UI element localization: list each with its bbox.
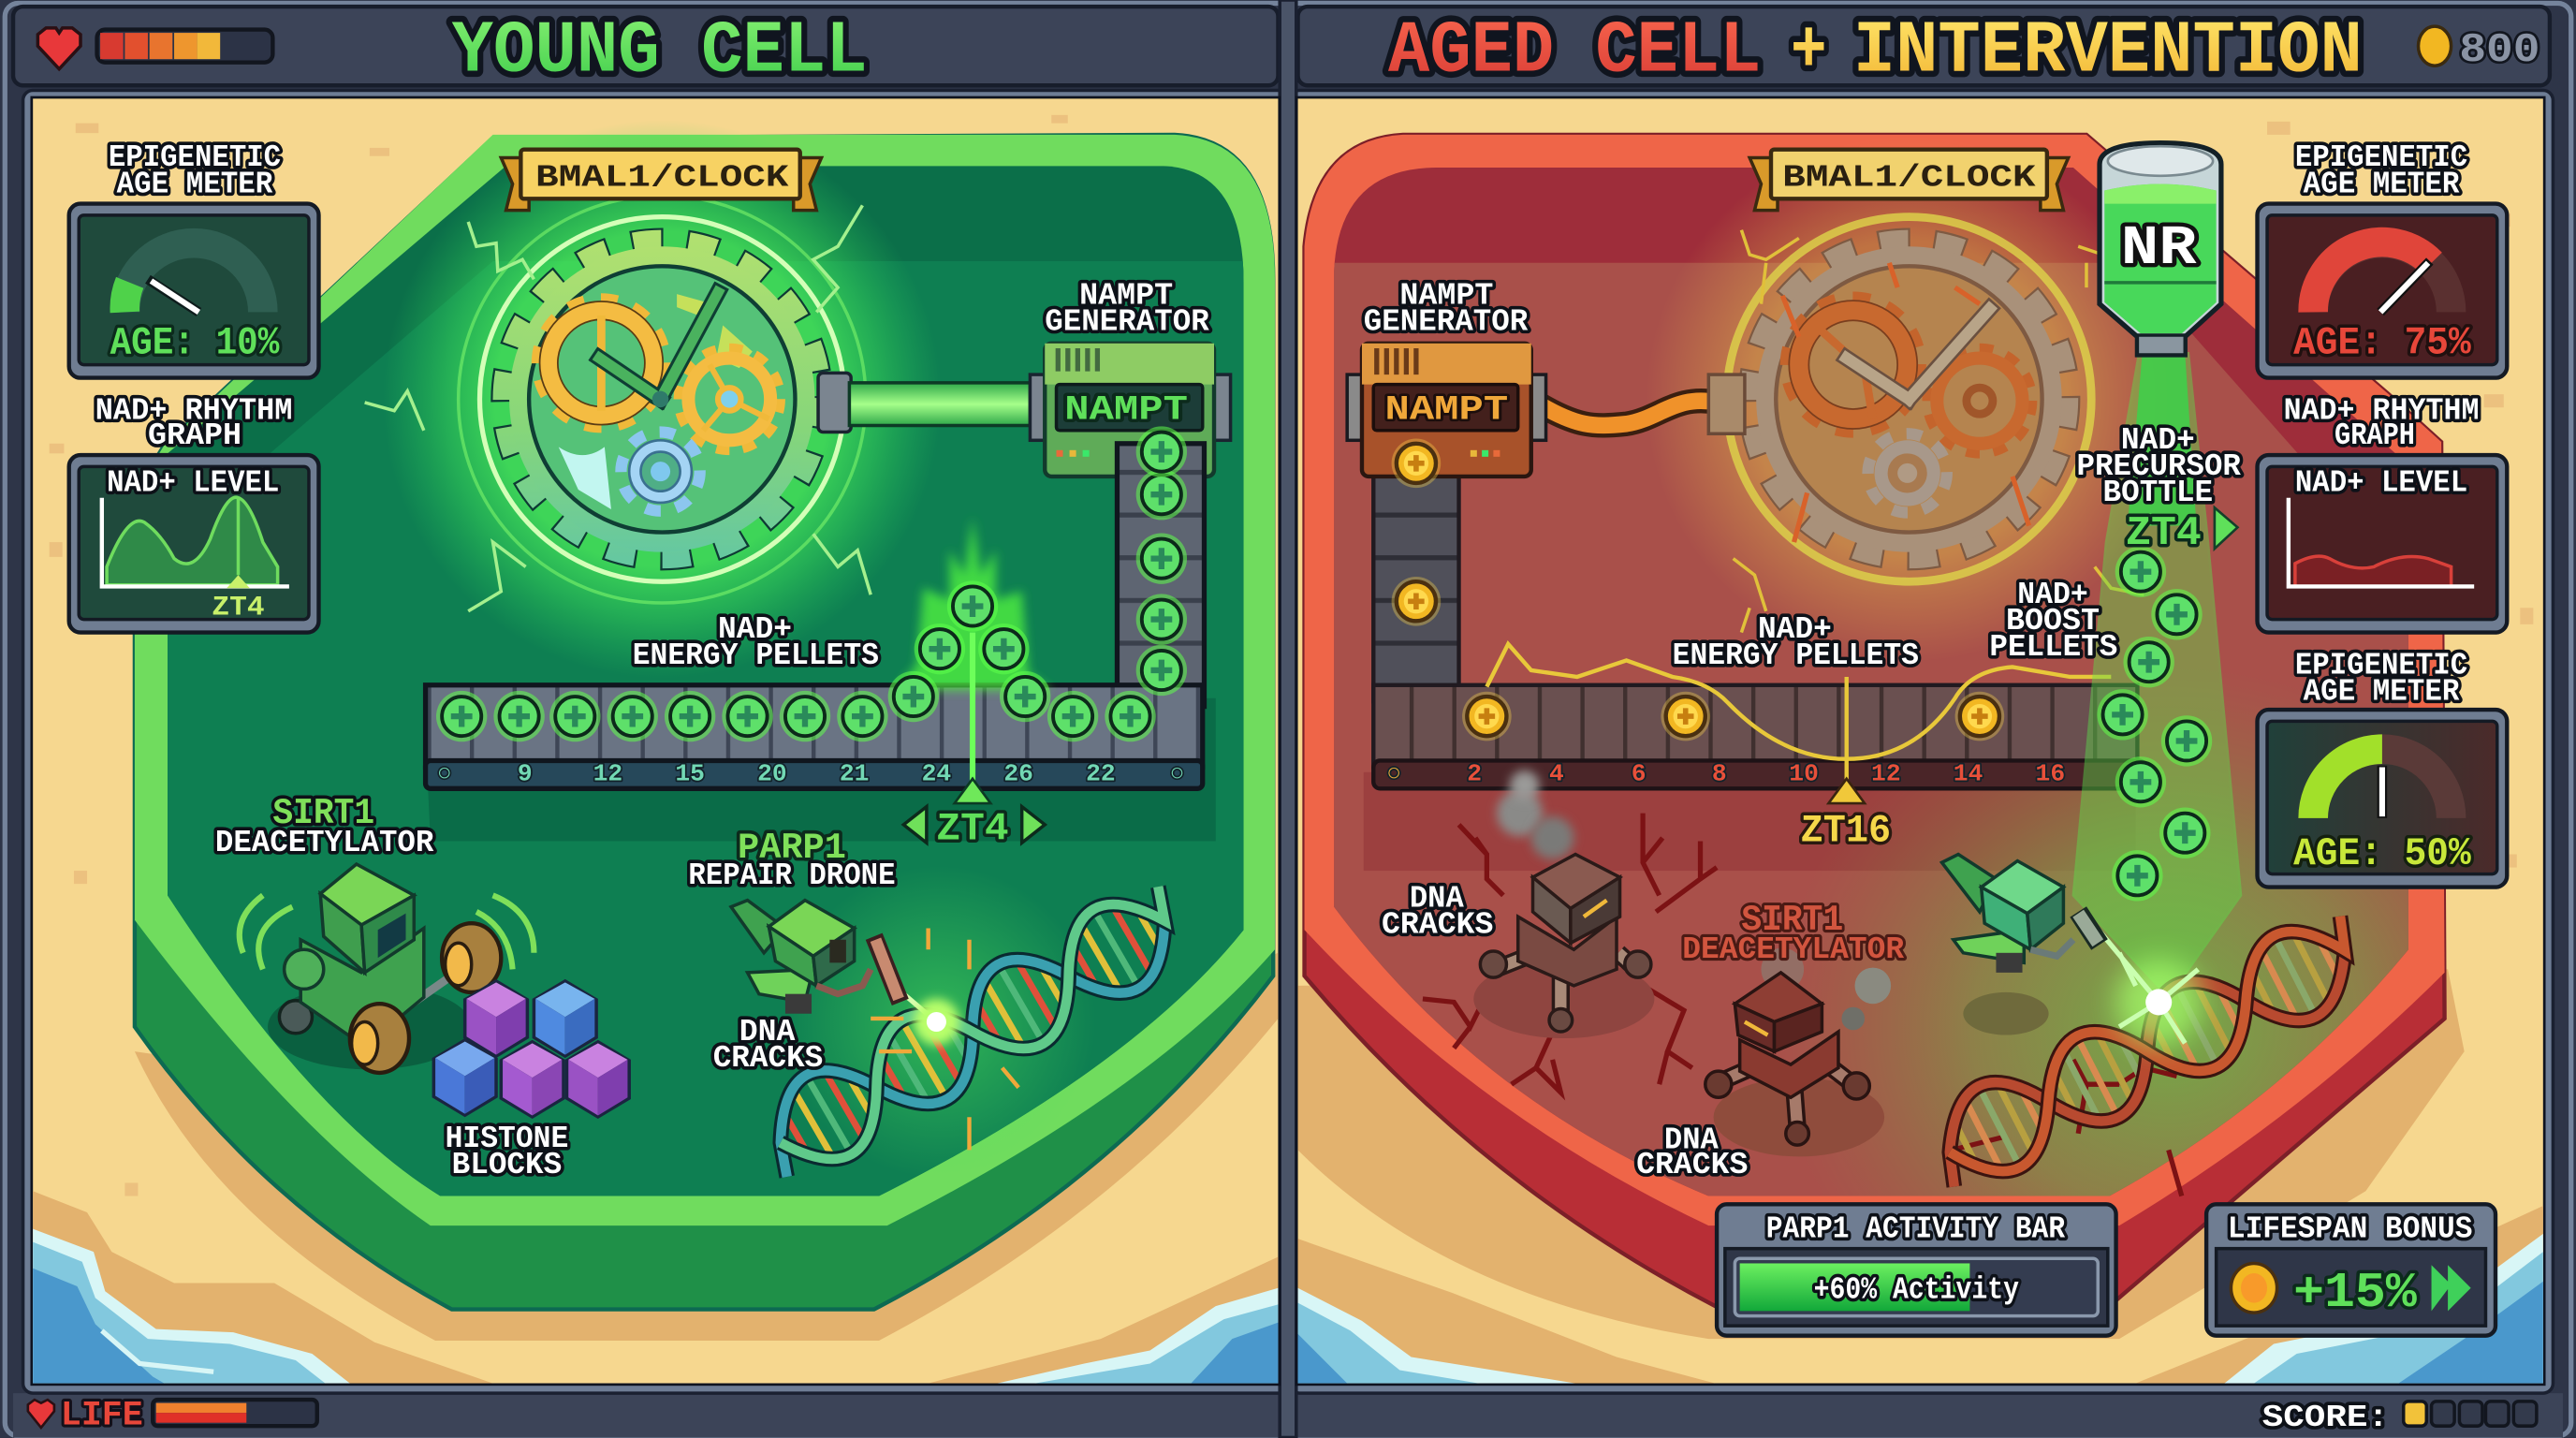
label: NAD+ precursor bottle: PRECURSOR — [2076, 449, 2241, 485]
coin count: 800 — [2459, 27, 2539, 74]
conveyor hour ticks: 2 — [1467, 760, 1482, 788]
ZT4 marker: young: ZT4 — [936, 807, 1009, 852]
conveyor hour ticks: 12 — [1871, 760, 1901, 788]
label: DNA cracks 2: DNA — [1664, 1123, 1719, 1159]
DNA glow: young — [783, 866, 1096, 1178]
label: epigenetic age meter: AGE METER — [117, 167, 272, 202]
broken SIRT1 robot 1 — [1473, 770, 1654, 1038]
shore: dark sand right — [929, 1256, 1278, 1384]
health bar — [97, 30, 272, 63]
age meter panel: restored 50: AGE: 50% — [2293, 831, 2471, 876]
age meter panel: aged 75 — [2258, 204, 2507, 378]
conveyor hour ticks: 12 — [593, 760, 622, 788]
label: histone blocks: BLOCKS — [452, 1148, 562, 1183]
label: DNA cracks: CRACKS — [713, 1041, 823, 1077]
NAD+ rhythm graph panel: aged — [2258, 455, 2507, 633]
label: NAD+ rhythm graph: GRAPH — [148, 418, 242, 454]
NAD+ rhythm line on belt: aged — [1486, 644, 2111, 785]
text labels: aged panel — [1364, 140, 2479, 1183]
NAMPT generator: aged: NAMPT — [1385, 390, 1508, 430]
title: aged cell: AGED CELL — [1388, 8, 1761, 93]
age meter panel: young: AGE: 10% — [110, 320, 280, 365]
sparks — [365, 205, 871, 611]
label: SIRT1 deacetylator: SIRT1 — [272, 793, 374, 834]
conveyor hour ticks: 26 — [1003, 760, 1033, 788]
NAD+ boost pellets — [2097, 546, 2212, 902]
lifespan bonus panel: LIFESPAN BONUS — [2228, 1211, 2472, 1247]
conveyor hour ticks: 9 — [518, 760, 533, 788]
icon: heart — [28, 1400, 54, 1428]
label: epigenetic age meter 1 — [2295, 140, 2467, 202]
PARP1 activity bar panel: +60% Activity — [1814, 1272, 2019, 1308]
age meter panel: young — [69, 204, 318, 378]
broken SIRT1 robot 2 — [1705, 948, 1891, 1156]
precursor beam — [2073, 353, 2241, 997]
lifespan bonus panel — [2206, 1204, 2496, 1336]
ZT4 marker: intervention — [2126, 507, 2237, 557]
label: DNA cracks 1: DNA — [1410, 882, 1464, 917]
label: NAMPT generator: GENERATOR — [1364, 305, 1528, 341]
score pips — [2404, 1401, 2537, 1426]
label: DNA cracks: DNA — [739, 1015, 795, 1050]
top HUD: young — [37, 8, 868, 93]
NAD+ rhythm graph panel: young — [69, 455, 318, 633]
title: young cell: YOUNG CELL — [452, 8, 868, 93]
label: NAD+ rhythm graph — [2284, 393, 2479, 454]
conveyor hour ticks: ○ — [437, 760, 452, 788]
PARP1 activity bar panel — [1717, 1204, 2116, 1336]
broken pipe: aged — [1536, 374, 1745, 433]
label: NAD+ energy pellets: NAD+ — [718, 612, 792, 648]
label: epigenetic age meter 2 — [2295, 648, 2467, 711]
PARP1 activity bar panel: PARP1 ACTIVITY BAR — [1766, 1211, 2065, 1247]
label: NAD+ boost pellets: NAD+ — [2017, 578, 2088, 613]
label: BMAL1/CLOCK banner aged: BMAL1/CLOCK — [1782, 160, 2036, 196]
conveyor hour ticks: 4 — [1549, 760, 1564, 788]
sand specks — [50, 115, 1068, 1196]
water: right shore — [997, 1288, 1278, 1384]
ZT4 peak flame — [896, 518, 1051, 690]
rusted gears — [1786, 298, 2032, 513]
conveyor hour ticks: 20 — [757, 760, 787, 788]
top HUD: aged — [1388, 8, 2539, 93]
PARP1 drone: aged — [1942, 855, 2100, 1035]
label: NAD+ boost pellets: BOOST — [2006, 604, 2100, 639]
label: SIRT1 deacetylator aged — [1682, 900, 1904, 968]
bottom HUD: life — [28, 1396, 317, 1435]
blue gear — [621, 433, 700, 511]
label: NAD+ rhythm graph: NAD+ RHYTHM — [95, 393, 292, 429]
label: life: LIFE — [61, 1396, 143, 1435]
NAD+ rhythm graph panel: aged: NAD+ LEVEL — [2295, 466, 2467, 502]
ZT4 marker: young — [903, 633, 1045, 852]
SIRT1 robot: young — [240, 864, 534, 1073]
beam ground glow — [1823, 715, 2408, 1196]
cell outer wall — [1305, 135, 2445, 1306]
label: epigenetic age meter 2: EPIGENETIC — [2295, 648, 2467, 683]
label: SIRT1 deacetylator: DEACETYLATOR — [215, 826, 433, 861]
label: PARP1 repair drone — [688, 828, 896, 894]
label: NAMPT generator — [1045, 279, 1209, 341]
title: intervention: INTERVENTION — [1853, 8, 2363, 93]
conveyor hour ticks — [437, 760, 1184, 788]
clock hands — [600, 292, 718, 407]
label: DNA cracks — [713, 1015, 823, 1077]
NAD+ rhythm graph panel: young: ZT4 — [212, 591, 265, 623]
DNA helix: young — [748, 875, 1197, 1188]
label: histone blocks — [446, 1122, 568, 1183]
NR bottle — [2100, 143, 2221, 355]
label: epigenetic age meter: EPIGENETIC — [109, 140, 281, 176]
NAD+ coins: aged — [1392, 439, 2004, 741]
cell membrane — [135, 135, 1275, 1225]
title: plus: + — [1791, 8, 1827, 93]
NAMPT generator: aged — [1347, 344, 1546, 477]
beam core — [2128, 353, 2197, 526]
label: NAD+ precursor bottle — [2076, 423, 2241, 511]
lifespan bonus panel: +15% — [2293, 1265, 2417, 1321]
water: right shore — [2224, 1234, 2543, 1384]
label: SIRT1 deacetylator aged: SIRT1 — [1741, 900, 1843, 941]
shore: dark sand left — [33, 1191, 493, 1384]
cell outer wall — [135, 135, 1273, 1310]
conveyor hour ticks: ○ — [1170, 760, 1184, 788]
conveyor hour ticks: 16 — [2036, 760, 2065, 788]
left clock gear glow — [383, 120, 942, 679]
label: epigenetic age meter — [109, 140, 281, 202]
cell membrane — [1305, 135, 2445, 1225]
label: BMAL1/CLOCK banner young: BMAL1/CLOCK — [535, 160, 788, 196]
shore: dark sand right — [2136, 1206, 2543, 1384]
conveyor hour ticks: 15 — [675, 760, 705, 788]
label: NAD+ rhythm graph: NAD+ RHYTHM — [2284, 393, 2479, 429]
NAD+ pellets: young — [436, 426, 1187, 741]
age meter panel: aged 75: AGE: 75% — [2293, 320, 2471, 365]
label: NAD+ rhythm graph — [95, 393, 292, 454]
label: BMAL1/CLOCK banner aged — [1749, 150, 2069, 211]
conveyor hour ticks: 8 — [1712, 760, 1727, 788]
label: score: SCORE: — [2262, 1401, 2389, 1436]
repair spark: aged — [2093, 923, 2202, 1045]
label: NAD+ energy pellets — [633, 612, 879, 674]
panel: young cell scene — [33, 98, 1281, 1384]
label: NAD+ rhythm graph: GRAPH — [2334, 418, 2415, 454]
label: NAMPT generator — [1364, 279, 1528, 341]
conveyor hour ticks: 10 — [1789, 760, 1819, 788]
conveyor hour ticks: 22 — [1086, 760, 1116, 788]
label: NAMPT generator: GENERATOR — [1045, 305, 1209, 341]
label: NAD+ boost pellets — [1989, 578, 2117, 666]
label: epigenetic age meter 1: EPIGENETIC — [2295, 140, 2467, 176]
label: DNA cracks 1: CRACKS — [1382, 908, 1493, 944]
NAD+ rhythm graph panel: young: NAD+ LEVEL — [107, 466, 279, 502]
conveyor belt: young — [426, 444, 1204, 788]
label: DNA cracks 2: CRACKS — [1636, 1148, 1748, 1183]
label: SIRT1 deacetylator aged: DEACETYLATOR — [1682, 932, 1904, 968]
right clock gear glow — [1647, 137, 2172, 662]
label: NAD+ precursor bottle: BOTTLE — [2103, 476, 2213, 511]
conveyor hour ticks: 6 — [1632, 760, 1647, 788]
bottom HUD: score — [2262, 1401, 2537, 1436]
cracks — [1423, 814, 2182, 1196]
conveyor hour ticks: 24 — [922, 760, 951, 788]
cell cytoplasm — [1334, 168, 2408, 1196]
histone blocks — [432, 979, 631, 1119]
label: NAD+ energy pellets: NAD+ — [1758, 612, 1832, 648]
label: SIRT1 deacetylator — [215, 793, 433, 861]
label: NAMPT generator: NAMPT — [1399, 279, 1493, 315]
label: DNA cracks 2 — [1636, 1123, 1748, 1183]
label: NAD+ energy pellets: ENERGY PELLETS — [1673, 638, 1919, 674]
label: PARP1 repair drone: REPAIR DRONE — [688, 858, 896, 894]
label: NAD+ boost pellets: PELLETS — [1989, 630, 2117, 666]
label: NAD+ energy pellets: ENERGY PELLETS — [633, 638, 879, 674]
NR bottle: NR — [2121, 216, 2197, 280]
ZT16 marker — [1801, 779, 1891, 853]
label: NAMPT generator: NAMPT — [1079, 279, 1173, 315]
NAMPT generator: young: NAMPT — [1064, 390, 1188, 430]
water: left shore — [33, 1229, 350, 1384]
label: DNA cracks 1 — [1382, 882, 1493, 944]
age meter panel: restored 50 — [2258, 710, 2507, 888]
PARP1 repair drone: young — [731, 901, 900, 1014]
text labels: young panel — [95, 140, 1209, 1183]
conveyor hour ticks: 14 — [1954, 760, 1983, 788]
DNA helix: aged — [1919, 904, 2376, 1198]
ZT4 marker: intervention: ZT4 — [2126, 510, 2202, 557]
icon: coin — [2419, 26, 2452, 66]
label: epigenetic age meter 1: AGE METER — [2304, 167, 2459, 202]
icon: heart — [37, 28, 80, 69]
cell cytoplasm — [168, 166, 1244, 1196]
conveyor belt: aged — [1373, 447, 2145, 788]
shore: dark sand left — [1298, 1239, 1715, 1384]
label: NAD+ energy pellets — [1673, 612, 1919, 674]
label: epigenetic age meter 2: AGE METER — [2304, 675, 2459, 711]
label: histone blocks: HISTONE — [446, 1122, 568, 1157]
water: left shore — [1298, 1288, 1575, 1384]
repair spark: young — [871, 928, 1018, 1150]
panel: aged cell scene — [1298, 98, 2563, 1388]
label: BMAL1/CLOCK banner young — [501, 150, 822, 211]
BMAL1/CLOCK gear: young — [365, 196, 871, 611]
label: NAD+ precursor bottle: NAD+ — [2121, 423, 2195, 459]
conveyor hour ticks: ○ — [1386, 760, 1401, 788]
BMAL1/CLOCK gear: aged — [1727, 217, 2144, 633]
NAMPT generator: young — [1030, 344, 1231, 477]
conveyor hour ticks: 21 — [840, 760, 869, 788]
conveyor hour ticks — [1386, 760, 2065, 788]
pipe to NAMPT: young — [818, 373, 1030, 433]
label: PARP1 repair drone: PARP1 — [738, 828, 846, 869]
life bar — [153, 1400, 317, 1426]
small orange gear — [679, 348, 781, 450]
orange gear — [537, 299, 666, 427]
ZT16 marker: ZT16 — [1801, 808, 1891, 853]
